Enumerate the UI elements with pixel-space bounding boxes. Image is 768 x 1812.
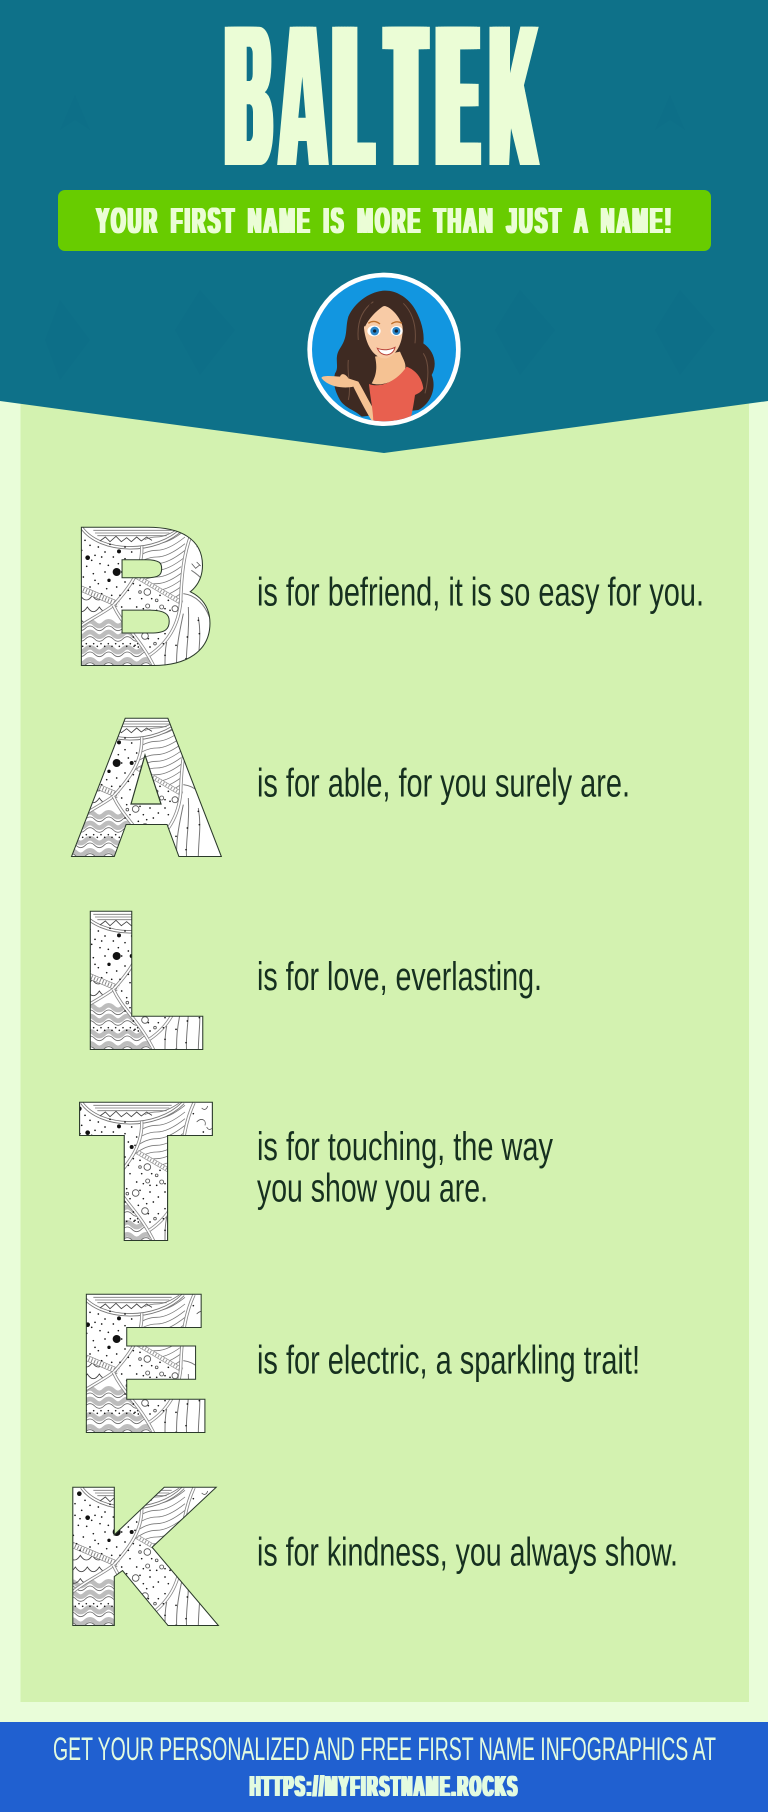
text: T lines: [257, 1125, 553, 1211]
letter E artwork: E: [80, 1262, 206, 1465]
letter A artwork: A: [77, 685, 217, 889]
letter B artwork: B: [76, 495, 212, 698]
letter B artwork: [80, 526, 210, 666]
panel: letters background: [20, 380, 749, 1702]
letter K artwork: K: [67, 1454, 206, 1658]
letter T artwork: T: [84, 1069, 207, 1273]
text: T lines: is for touching, the way: [257, 1125, 553, 1169]
header: teal chevron banner: [0, 0, 768, 453]
text: T lines: you show you are.: [257, 1167, 488, 1211]
letter A artwork: [70, 718, 222, 857]
tagline bar: [58, 190, 711, 251]
letter L artwork: [90, 910, 204, 1050]
letter E artwork: [86, 1294, 206, 1433]
text: A line: is for able, for you surely are.: [257, 762, 630, 806]
letter L artwork: L: [84, 878, 202, 1082]
avatar: cartoon woman in circle: [307, 273, 461, 426]
title letter counters: [247, 25, 548, 167]
letter T artwork: [79, 1102, 213, 1241]
footer bar: [0, 1722, 768, 1812]
letter K artwork: [72, 1486, 220, 1626]
text: L line: is for love, everlasting.: [257, 955, 542, 999]
